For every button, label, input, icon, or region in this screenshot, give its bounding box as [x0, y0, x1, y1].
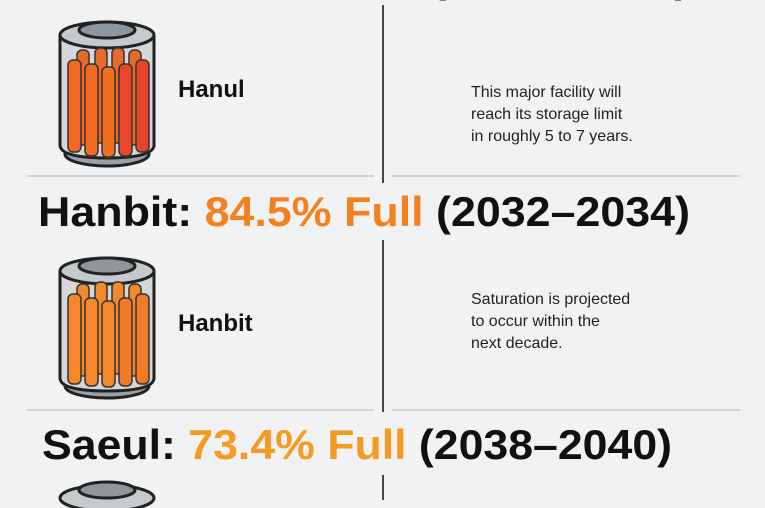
- icon: Hanbit canister: [58, 256, 156, 400]
- icon: Hanul canister: [58, 20, 156, 168]
- text: Hanbit description: to occur within the: [471, 313, 600, 330]
- label: Hanbit: Hanbit: [178, 310, 253, 337]
- heading: Saeul: Saeul: 73.4% Full (2038–2040): [42, 421, 672, 468]
- label: Hanul: Hanul: [178, 76, 245, 103]
- text: Hanul description: [471, 84, 633, 145]
- text: Hanul description: reach its storage limit: [471, 106, 622, 123]
- text: Hanul description: in roughly 5 to 7 years.: [471, 128, 633, 145]
- text: Hanbit description: [471, 291, 630, 352]
- icon: Saeul canister (top): [58, 480, 156, 508]
- text: Hanbit description: next decade.: [471, 335, 563, 352]
- text: Hanbit description: Saturation is projected: [471, 291, 630, 308]
- heading: Hanbit: Hanbit: 84.5% Full (2032–2034): [38, 188, 690, 235]
- text: Hanul description: This major facility will: [471, 84, 621, 101]
